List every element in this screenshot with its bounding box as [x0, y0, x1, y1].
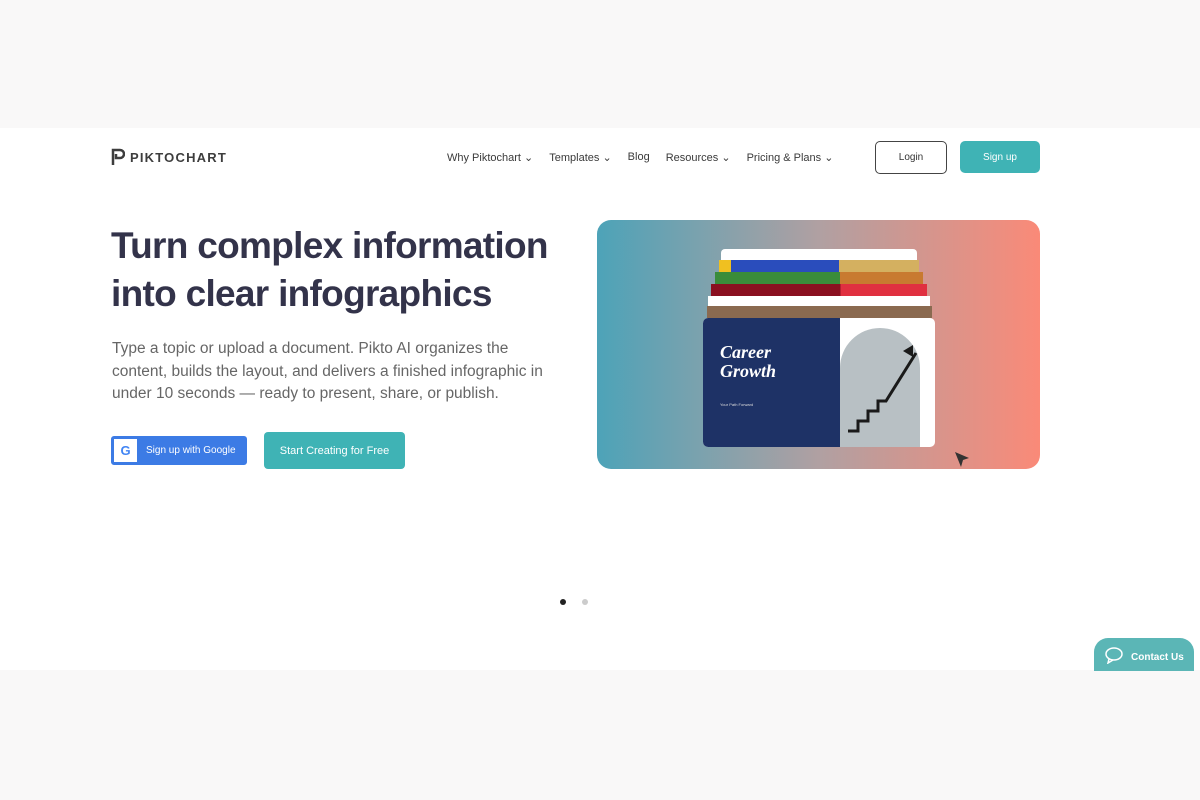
contact us button	[1094, 638, 1194, 671]
headline: into clear infographics	[111, 273, 492, 314]
nav links: Pricing & Plans ⌄	[747, 152, 833, 164]
hero image	[597, 220, 1040, 469]
nav links: Resources ⌄	[666, 152, 731, 164]
login button	[875, 141, 947, 174]
nav links: Templates ⌄	[549, 152, 612, 164]
nav links: Blog	[628, 151, 650, 163]
sign up button: Sign up	[983, 152, 1017, 163]
google button: G	[120, 443, 131, 458]
contact us button: Contact Us	[1131, 652, 1184, 663]
description: Type a topic or upload a document. Pikto AI organizes the content, builds the layout, and delivers a finished infographic in under 10 seconds — ready to present, share, or publish.	[112, 340, 543, 402]
start creating button: Start Creating for Free	[280, 445, 389, 457]
cursor icon	[955, 452, 969, 467]
headline: Turn complex information	[111, 225, 548, 266]
login button: Login	[899, 152, 923, 163]
nav links	[447, 151, 833, 164]
headline	[111, 225, 548, 314]
main card: Your Path Forward	[720, 402, 753, 407]
google button: Sign up with Google	[146, 445, 236, 456]
stacked cards	[721, 249, 917, 269]
start creating button	[264, 432, 405, 469]
sign up button	[960, 141, 1040, 173]
main card	[703, 318, 935, 447]
page band	[0, 128, 1200, 670]
google button	[111, 436, 247, 465]
main card: Growth	[720, 361, 776, 381]
nav links: Why Piktochart ⌄	[447, 152, 533, 164]
main card: Career	[720, 342, 771, 362]
carousel dots	[560, 599, 566, 605]
logo: PIKTOCHART	[130, 150, 227, 164]
